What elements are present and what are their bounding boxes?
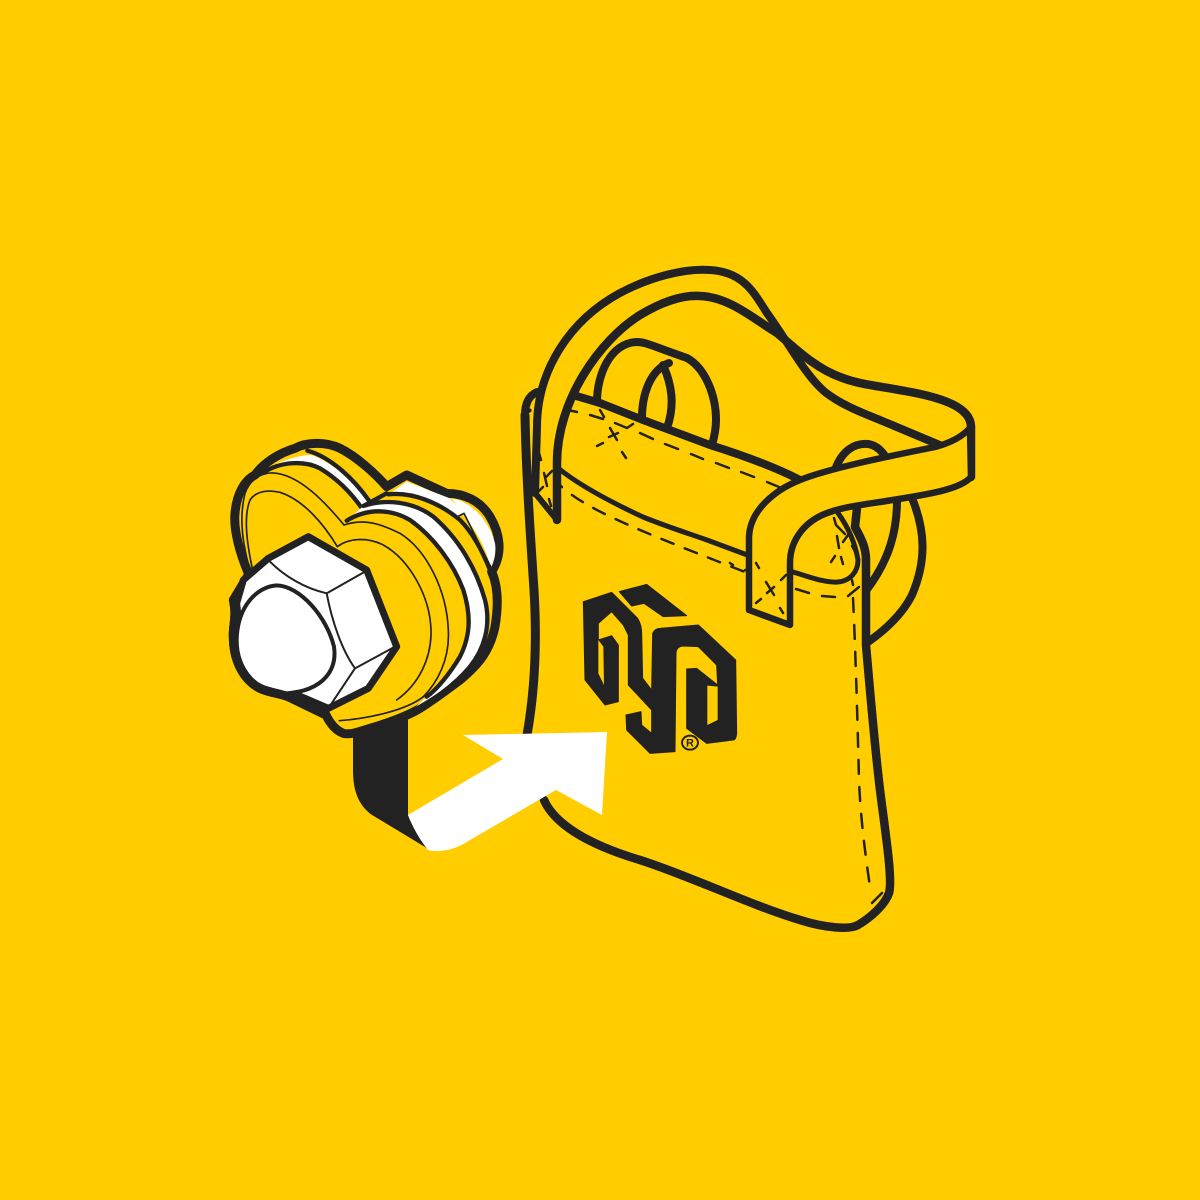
hex edges — [270, 562, 365, 593]
rings behind bag, top — [597, 342, 716, 445]
logo — [583, 584, 737, 753]
strap inner edge — [557, 296, 971, 520]
bag left side — [525, 415, 535, 735]
rings behind bag, right — [835, 444, 923, 642]
arrow — [353, 715, 607, 851]
right washer lines — [363, 502, 487, 715]
left tab end — [535, 493, 557, 520]
arrow head and shaft, white side — [408, 732, 607, 851]
right washer, white — [347, 502, 487, 715]
logo: R — [686, 738, 694, 750]
rear bolt end, white — [452, 498, 495, 568]
silhouette rim over dome — [233, 603, 326, 715]
arrow shaft, dark side — [353, 715, 430, 850]
bolt dome — [237, 585, 334, 693]
bag body fill — [525, 395, 890, 928]
bag with strap and rings — [525, 270, 971, 928]
bag bottom and right side — [544, 508, 890, 928]
bolt silhouette — [233, 443, 499, 734]
rear nut, white — [390, 482, 463, 518]
top washer lines — [307, 451, 369, 501]
left loop edge — [525, 392, 537, 415]
hex nut — [237, 537, 397, 708]
strap outer edge — [535, 270, 942, 493]
bolt assembly — [233, 443, 499, 734]
front plate fine lines — [242, 473, 448, 721]
stitching — [568, 410, 882, 903]
strap left stitching — [538, 453, 562, 506]
bag fold — [558, 468, 750, 556]
bag top edge — [573, 395, 800, 480]
strap right stitching — [730, 563, 786, 613]
rear nut lines — [388, 494, 490, 570]
strap left band fill — [535, 270, 777, 520]
top washer, white — [265, 455, 368, 508]
strap right band — [749, 428, 971, 625]
